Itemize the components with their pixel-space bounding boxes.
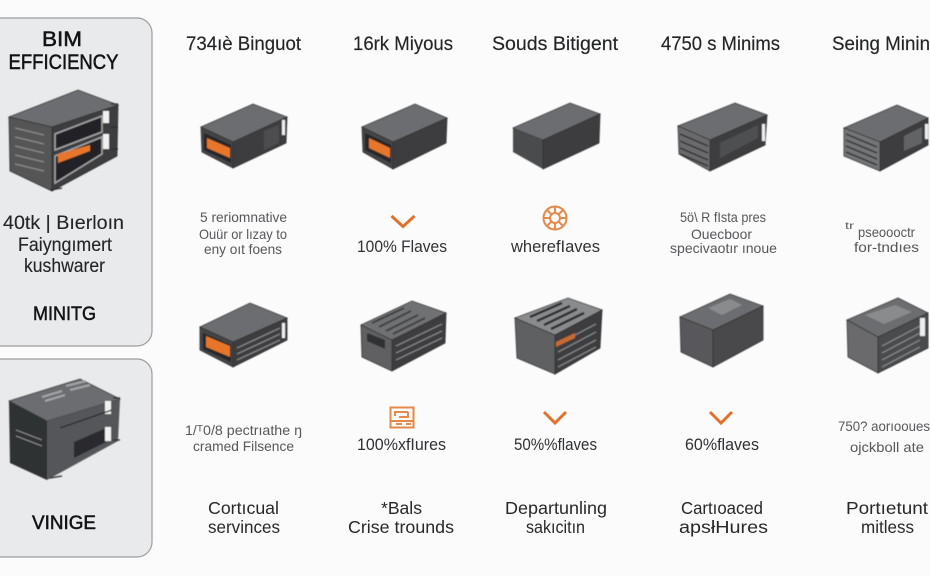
server 2-3 (515, 298, 602, 374)
caption 2-1 (185, 422, 302, 454)
heading: BIM efficiency (8, 28, 118, 74)
caption 2-5 (838, 418, 930, 455)
server 1-1 (201, 104, 287, 168)
server 2-4 (680, 294, 763, 367)
server 2-5 (847, 298, 928, 373)
row 2 captions (185, 408, 930, 455)
label column 1: Cortıcual (208, 498, 279, 518)
caption 2-4: 60%flaves (685, 436, 759, 454)
caption 2-2: 100%xfIures (357, 436, 446, 454)
caption 2-3: 50%%flaves (514, 436, 597, 454)
label column 3: Departunling (505, 498, 607, 518)
label column 5: Portıetunt (846, 498, 928, 518)
caption 2-1: 1/ᵀ0/8 pectrıathe ŋ (185, 422, 302, 438)
caption 1-4: specivaotır ınoue (670, 240, 777, 256)
caption 1-5: for-tndıes (854, 239, 919, 255)
icon: large server with orange drive (9, 90, 118, 191)
text: sidebar description (3, 213, 124, 277)
label column 2: *Bals (381, 498, 422, 518)
caption 1-4: 5ö\ R fIsta pres (680, 209, 766, 225)
caption 1-5 (845, 221, 919, 255)
column heading 1: 734ıè Binguot (186, 34, 302, 55)
label column 2: Crise trounds (348, 517, 454, 537)
bottom labels (208, 498, 928, 537)
label column 4 (679, 498, 768, 537)
icon: orange chevron 1-2 (392, 216, 414, 226)
caption 1-3: wherefIaves (510, 238, 600, 256)
server 1-4 (678, 103, 767, 171)
label column 1: servinces (208, 517, 280, 537)
label column 3: sakıcitın (526, 517, 585, 537)
heading: BIM efficiency: EFFICIENCY (8, 51, 118, 74)
panel: BIM efficiency sidebar (0, 18, 152, 346)
label column 3 (505, 498, 607, 537)
column heading 3: Souds Bitigent (492, 34, 619, 55)
heading: BIM efficiency: BIM (42, 28, 82, 51)
server 1-3 (513, 103, 600, 169)
caption 1-1: eny oıt foens (204, 241, 282, 257)
row 1 servers (201, 103, 928, 171)
caption 1-1: Ouür or lızay to (199, 226, 287, 242)
caption 1-5: tr (845, 221, 855, 232)
panel: vintage sidebar (0, 359, 152, 557)
caption 1-4: Ouecboor (691, 226, 752, 242)
caption 1-5: pseoooctr (858, 224, 915, 240)
row 1 captions (199, 206, 919, 257)
label column 1 (208, 498, 280, 537)
label column 5 (846, 498, 928, 537)
label column 2 (348, 498, 454, 537)
label: VINIGE: VINIGE (32, 513, 96, 534)
caption 1-4 (670, 209, 777, 256)
server 2-2 (361, 301, 446, 371)
caption 1-2: 100% Flaves (357, 238, 447, 256)
column heading 2: 16rk Miyous (353, 34, 453, 55)
text: sidebar description: 40tk | Bıerloın (3, 213, 124, 234)
caption 2-5: ojckboll ate (850, 439, 924, 455)
caption 1-1: 5 reriomnative (200, 209, 287, 225)
row 2 servers (200, 294, 928, 374)
label column 4: Cartıoaced (681, 498, 763, 518)
server 1-5 (844, 105, 928, 171)
caption 1-1 (199, 209, 287, 257)
label column 4: apsłHures (679, 517, 768, 537)
server 1-2 (362, 104, 447, 169)
icon: dark server (9, 379, 120, 480)
server 2-1 (200, 303, 287, 367)
icon: orange chevron 2-3 (544, 412, 566, 423)
icon: orange chevron 2-4 (710, 412, 732, 423)
label: MINITG: MINITG (33, 304, 96, 325)
label column 5: mitless (861, 517, 914, 537)
caption 2-1: cramed Filsence (193, 438, 294, 454)
icon: orange gear ring (544, 206, 566, 230)
column heading 4: 4750 s Minims (661, 34, 780, 55)
icon: orange screen tile (390, 408, 414, 428)
header row (186, 34, 930, 55)
column heading 5: Seing Minin (832, 34, 930, 55)
text: sidebar description: Faiyngımert (18, 235, 113, 256)
text: sidebar description: kushwarer (24, 256, 106, 277)
